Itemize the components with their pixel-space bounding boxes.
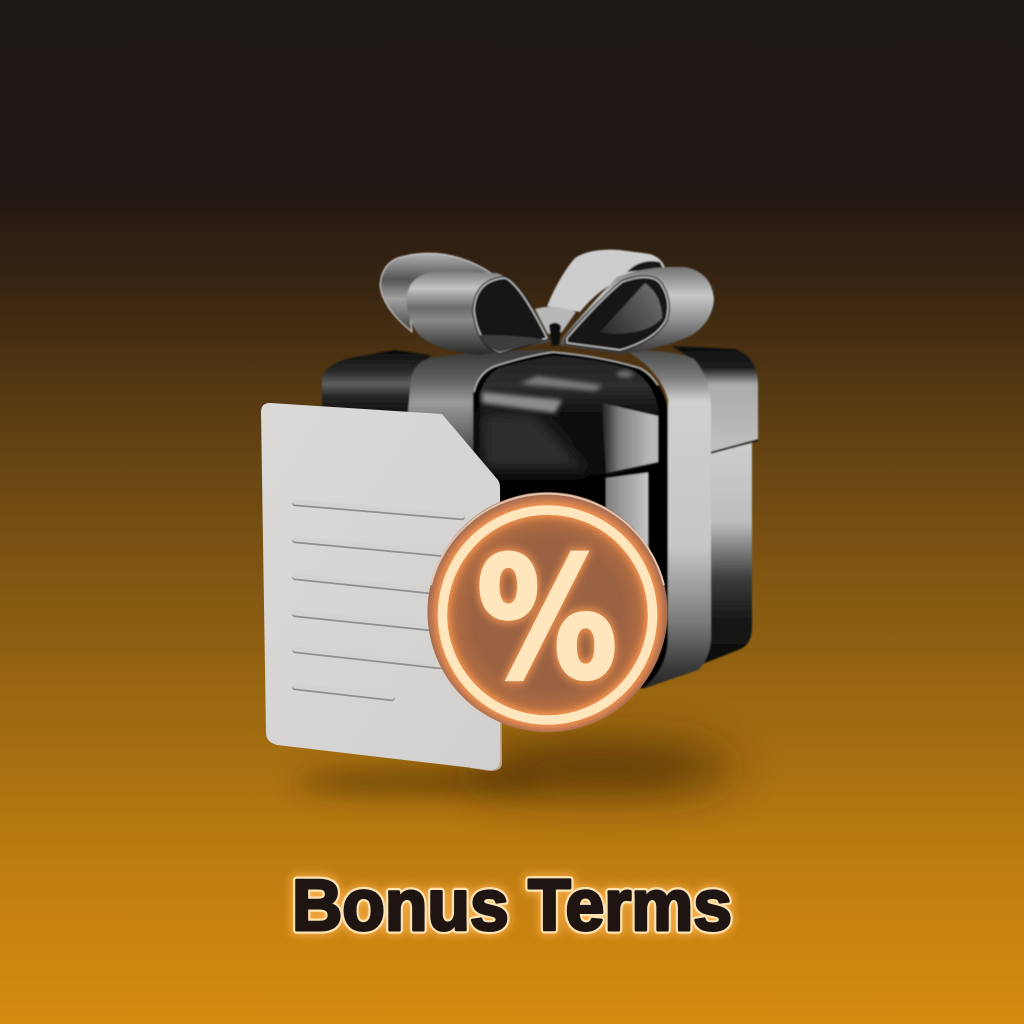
lid central block outline <box>473 351 668 478</box>
title: Bonus Terms <box>292 866 732 946</box>
badge glowing ring <box>442 510 652 720</box>
box lower body <box>470 468 668 688</box>
lid ribbon highlight outline <box>474 352 658 392</box>
bow centre band <box>535 307 576 334</box>
box right side <box>700 443 752 665</box>
bow left lower lip <box>480 335 547 352</box>
bow far right loop <box>547 250 665 312</box>
box grey panel <box>606 465 648 640</box>
lid front gloss top <box>520 376 602 391</box>
percent badge <box>428 492 668 732</box>
lid front soft grey diagonal <box>482 412 590 470</box>
document text lines <box>295 502 462 698</box>
lid right grey face <box>602 403 658 473</box>
badge disc <box>428 492 668 732</box>
title: Bonus Terms <box>292 866 732 946</box>
bow near right loop <box>560 267 714 354</box>
lid central face <box>480 356 659 474</box>
bow right inner fold <box>600 283 662 334</box>
document edge <box>470 483 502 771</box>
lid right side <box>672 346 758 453</box>
lid left portion <box>322 350 430 412</box>
front vertical ribbon <box>625 350 711 689</box>
bow far left loop <box>380 253 491 332</box>
lid lower edge <box>606 463 658 475</box>
lid front gloss left <box>482 392 562 413</box>
bow knot <box>549 323 561 346</box>
bow near right opening <box>567 277 668 350</box>
document <box>261 403 502 771</box>
lid edge line <box>710 440 758 453</box>
bow near left loop <box>407 271 550 355</box>
percent sign: % <box>476 521 618 717</box>
title: Bonus Terms <box>292 866 732 946</box>
floor shadow <box>295 744 735 793</box>
left ribbon band <box>408 350 553 452</box>
percent sign: % <box>476 521 618 717</box>
bow far right opening <box>627 261 663 272</box>
document sheet <box>261 403 500 770</box>
bow near left opening <box>474 278 547 352</box>
lid front gloss corner <box>617 371 633 377</box>
gift box <box>322 250 758 689</box>
